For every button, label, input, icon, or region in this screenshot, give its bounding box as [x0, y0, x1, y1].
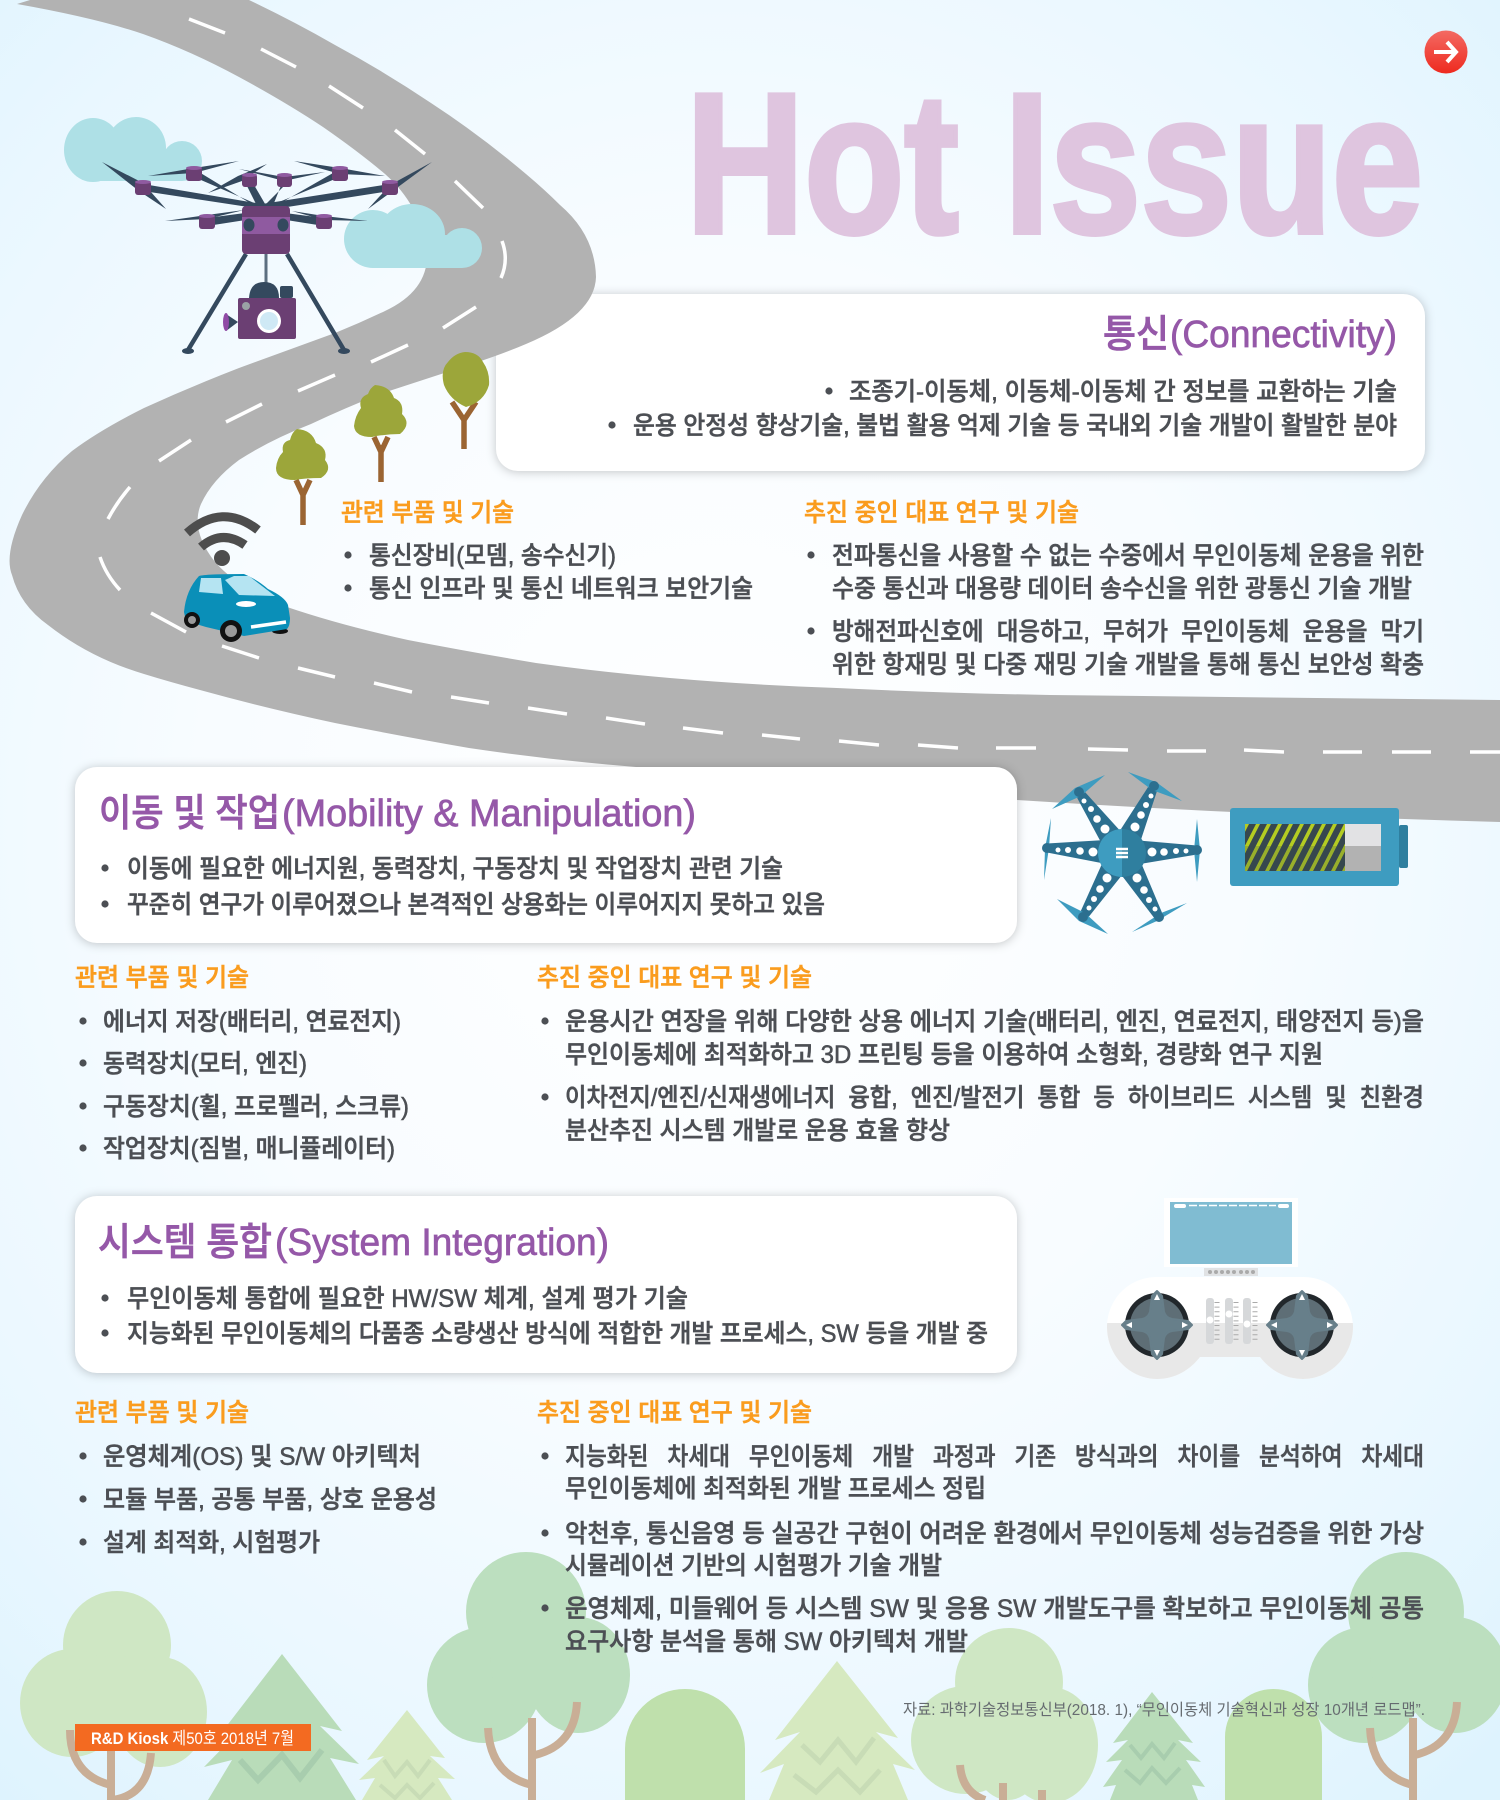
bullets: mobility summary [101, 855, 825, 919]
system: research: 운영체제, 미들웨어 등 시스템 SW 및 응용 SW 개발도구를 확보하고 무인이동체 공통 [565, 1595, 1424, 1623]
tree: pine 1 [204, 1654, 359, 1800]
footer badge: R&D Kiosk 제50호 2018년 7월 [91, 1729, 294, 1748]
connectivity: related parts: 관련 부품 및 기술 [341, 499, 514, 527]
drone arms and blades [102, 161, 432, 226]
connectivity: related parts [341, 499, 753, 603]
mobility: related parts: 에너지 저장(배터리, 연료전지) [103, 1008, 401, 1036]
connectivity: research: 전파통신을 사용할 수 없는 수중에서 무인이동체 운용을 위한 [832, 542, 1424, 570]
system: research: 악천후, 통신음영 등 실공간 구현이 어려운 환경에서 무인이동체 성능검증을 위한 가상 [565, 1520, 1424, 1548]
connectivity: related parts: 통신 인프라 및 통신 네트워크 보안기술 [369, 575, 753, 603]
roadside trees [276, 352, 489, 525]
footer badge [75, 1724, 311, 1751]
connectivity: research: 위한 항재밍 및 다중 재밍 기술 개발을 통해 통신 보안성 확충 [832, 651, 1424, 679]
bullets: connectivity summary [608, 378, 1397, 440]
connectivity: research [804, 499, 1424, 679]
panel: connectivity card text [608, 314, 1397, 440]
tree 2 [354, 385, 407, 482]
tree: round left [20, 1591, 207, 1800]
tree: pine 2 [359, 1710, 455, 1800]
system: related parts: 모듈 부품, 공통 부품, 상호 운용성 [103, 1486, 437, 1514]
tree: round centre-right [911, 1628, 1098, 1800]
bullets: mobility summary: 꾸준히 연구가 이루어졌으나 본격적인 상용화는 이루어지지 못하고 있음 [127, 891, 825, 919]
drone legs [182, 254, 350, 354]
mobility: research: 추진 중인 대표 연구 및 기술 [537, 964, 812, 992]
connectivity: research: 추진 중인 대표 연구 및 기술 [804, 499, 1079, 527]
controller sliders [1206, 1298, 1255, 1344]
mobility: research: 분산추진 시스템 개발로 운용 효율 향상 [565, 1117, 950, 1145]
background forest [20, 1552, 1500, 1800]
clouds [64, 117, 482, 268]
bullets: connectivity summary: 조종기-이동체, 이동체-이동체 간 정보를 교환하는 기술 [849, 378, 1397, 406]
bullets: system summary: 무인이동체 통합에 필요한 HW/SW 체계, 설계 평가 기술 [127, 1285, 688, 1313]
icon: remote controller [1107, 1198, 1353, 1379]
mobility: research [537, 964, 1424, 1145]
heading: mobility [99, 793, 696, 835]
tree 3 [443, 352, 489, 449]
bullets: mobility summary: 이동에 필요한 에너지원, 동력장치, 구동장치 및 작업장치 관련 기술 [127, 855, 783, 883]
bullets: system summary: 지능화된 무인이동체의 다품종 소량생산 방식에 적합한 개발 프로세스, SW 등을 개발 중 [127, 1320, 988, 1348]
system: related parts: 관련 부품 및 기술 [75, 1399, 249, 1427]
controller body [1107, 1277, 1353, 1379]
connectivity: research: 방해전파신호에 대응하고, 무허가 무인이동체 운용을 막기 [832, 618, 1424, 646]
icon: camera drone [102, 161, 432, 354]
mobility: related parts: 작업장치(짐벌, 매니퓰레이터) [103, 1135, 395, 1163]
bush 2 [1225, 1689, 1322, 1800]
icon: next arrow [1424, 30, 1468, 74]
tree: round centre-left [427, 1552, 630, 1800]
icon: hexacopter top view [1042, 772, 1202, 934]
system: research: 시뮬레이션 기반의 시험평가 기술 개발 [565, 1552, 942, 1580]
source note: 자료: 과학기술정보통신부(2018. 1), “무인이동체 기술혁신과 성장 10개년 로드맵”. [903, 1701, 1425, 1719]
heading: connectivity: (Connectivity) [1170, 314, 1397, 356]
mobility: research: 운용시간 연장을 위해 다양한 상용 에너지 기술(배터리, 엔진, 연료전지, 태양전지 등)을 [565, 1008, 1424, 1036]
mobility: research: 이차전지/엔진/신재생에너지 융합, 엔진/발전기 통합 등 하이브리드 시스템 및 친환경 [565, 1084, 1424, 1112]
panel: system integration card [75, 1196, 1017, 1373]
drone camera [223, 282, 296, 339]
bush 1 [625, 1689, 745, 1800]
controller dots [1204, 1268, 1258, 1276]
heading: mobility: 이동 및 작업 [99, 793, 280, 835]
system: related parts [75, 1399, 437, 1557]
mobility: related parts [75, 964, 409, 1163]
mobility: related parts: 동력장치(모터, 엔진) [103, 1050, 307, 1078]
system: research [537, 1399, 1424, 1656]
system: research: 무인이동체에 최적화된 개발 프로세스 정립 [565, 1475, 986, 1503]
mobility: related parts: 구동장치(휠, 프로펠러, 스크류) [103, 1093, 409, 1121]
heading: system integration: 시스템 통합 [98, 1222, 272, 1264]
icon: wifi [187, 517, 258, 566]
system: research: 지능화된 차세대 무인이동체 개발 과정과 기존 방식과의 차이를 분석하여 차세대 [565, 1443, 1424, 1471]
connectivity: research: 수중 통신과 대용량 데이터 송수신을 위한 광통신 기술 개발 [832, 575, 1412, 603]
mobility: related parts: 관련 부품 및 기술 [75, 964, 249, 992]
heading: connectivity: 통신 [1103, 314, 1169, 356]
tree: round right [1308, 1552, 1500, 1800]
heading: system integration: (System Integration) [275, 1222, 609, 1264]
card: connectivity background [496, 294, 1425, 471]
connectivity: related parts: 통신장비(모뎀, 송수신기) [369, 542, 616, 570]
heading: mobility: (Mobility & Manipulation) [282, 793, 696, 835]
panel: mobility card [75, 767, 1017, 943]
tree: pine 4 [1103, 1692, 1205, 1800]
controller joysticks [1122, 1291, 1337, 1359]
system: research: 요구사항 분석을 통해 SW 아키텍처 개발 [565, 1628, 968, 1656]
bullets: system summary [101, 1285, 988, 1348]
bullets: connectivity summary: 운용 안정성 향상기술, 불법 활용 억제 기술 등 국내외 기술 개발이 활발한 분야 [633, 412, 1397, 440]
system: research: 추진 중인 대표 연구 및 기술 [537, 1399, 812, 1427]
controller screen [1164, 1198, 1298, 1267]
heading: system integration [98, 1222, 609, 1264]
mobility: research: 무인이동체에 최적화하고 3D 프린팅 등을 이용하여 소형화, 경량화 연구 지원 [565, 1041, 1323, 1069]
system: related parts: 설계 최적화, 시험평가 [103, 1529, 320, 1557]
tree 1 [276, 429, 328, 525]
road [10, 0, 1500, 822]
drone motors [135, 166, 398, 229]
tree: pine 3 [760, 1661, 915, 1800]
icon: car [184, 574, 290, 642]
system: related parts: 운영체계(OS) 및 S/W 아키텍처 [103, 1443, 421, 1471]
icon: battery [1230, 808, 1408, 886]
drone body [242, 206, 290, 254]
